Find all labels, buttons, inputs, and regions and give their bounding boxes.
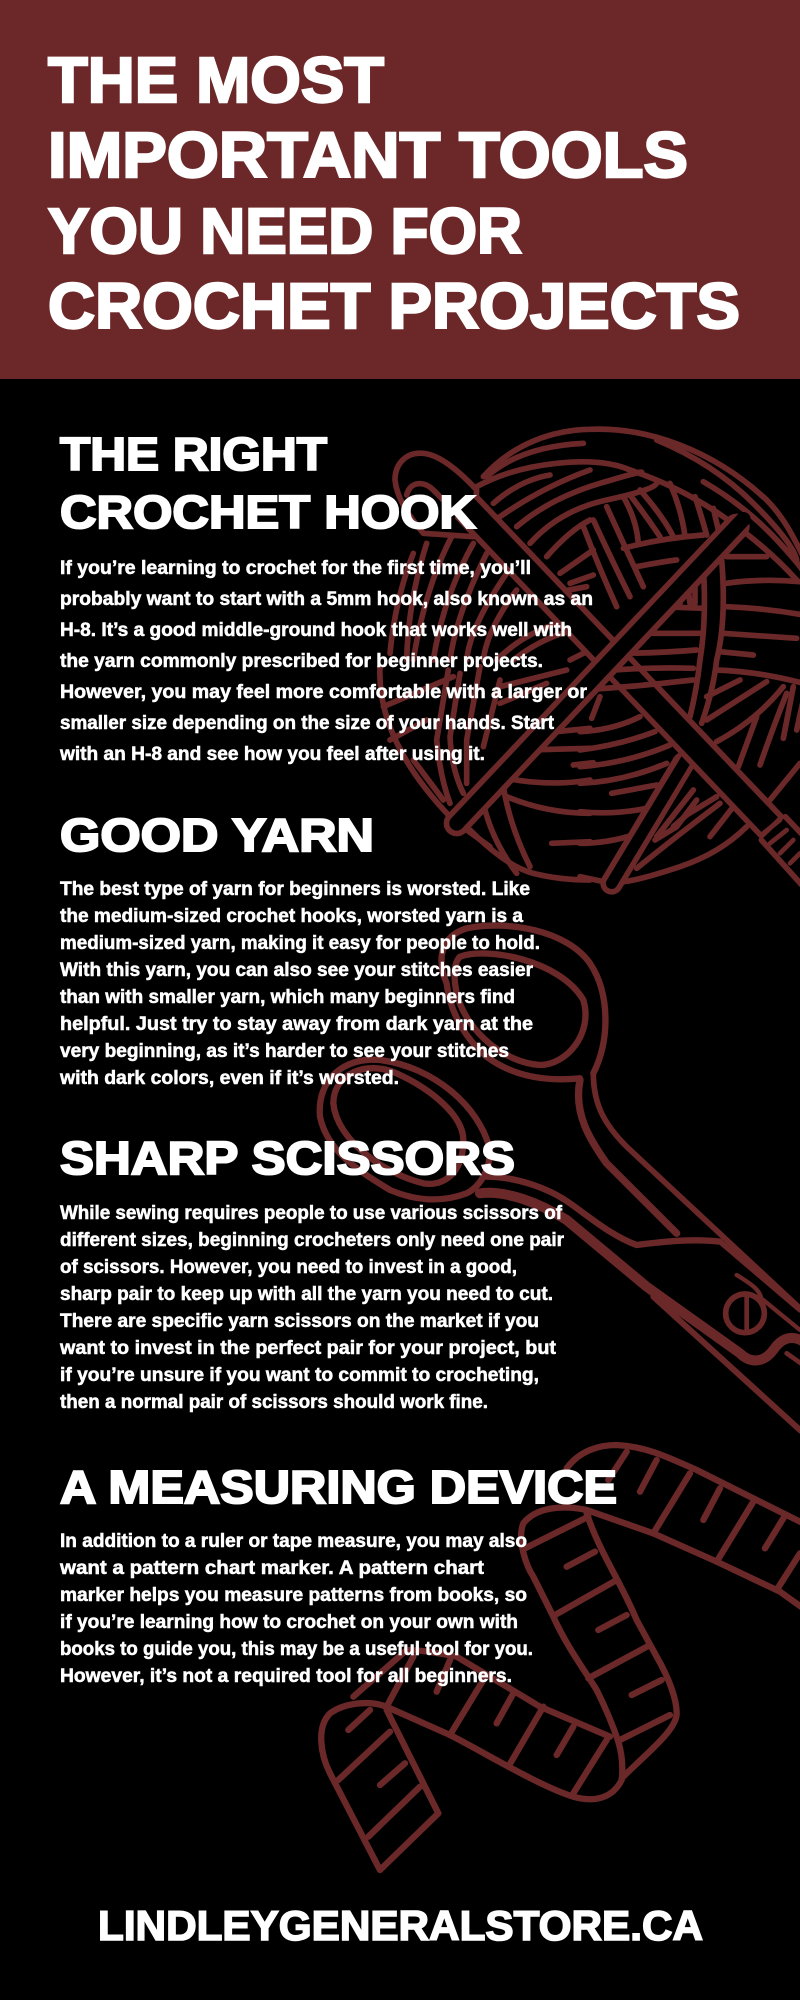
title: CROCHET PROJECTS	[48, 270, 740, 342]
title: YOU NEED FOR	[48, 195, 522, 267]
body text: There are specific yarn scissors on the market if you	[60, 1311, 539, 1332]
body text: While sewing requires people to use various scissors of	[60, 1203, 563, 1224]
body text: than with smaller yarn, which many beginners find	[60, 987, 515, 1008]
body text: want a pattern chart marker. A pattern chart	[59, 1558, 485, 1579]
body text	[59, 1203, 565, 1413]
icon: scissors	[320, 926, 800, 1447]
footer website: LINDLEYGENERALSTORE.CA	[98, 1902, 703, 1949]
title: IMPORTANT TOOLS	[48, 119, 688, 191]
body text: want to invest in the perfect pair for your project, but	[59, 1338, 557, 1359]
body text: if you’re learning how to crochet on your own with	[60, 1612, 518, 1633]
heading	[60, 428, 476, 538]
body text: probably want to start with a 5mm hook, also known as an	[60, 589, 593, 610]
header banner	[0, 0, 800, 379]
heading: THE RIGHT	[60, 428, 327, 480]
body text: with dark colors, even if it’s worsted.	[59, 1068, 399, 1089]
body text: medium-sized yarn, making it easy for people to hold.	[60, 933, 540, 954]
body text: sharp pair to keep up with all the yarn you need to cut.	[60, 1284, 553, 1305]
heading: SHARP SCISSORS	[60, 1132, 515, 1184]
section: good yarn	[59, 809, 540, 1089]
second hook shaft	[457, 527, 737, 823]
title	[48, 44, 740, 342]
body text: with an H-8 and see how you feel after using it.	[59, 744, 485, 765]
title: THE MOST	[48, 44, 384, 116]
body text: of scissors. However, you need to invest in a good,	[60, 1257, 517, 1278]
body text: If you’re learning to crochet for the first time, you’ll	[60, 558, 531, 579]
heading: CROCHET HOOK	[60, 486, 476, 538]
body text: different sizes, beginning crocheters only need one pair	[60, 1230, 565, 1251]
strands crossing the shaft	[593, 668, 693, 672]
section: a measuring device	[59, 1461, 617, 1687]
body text: marker helps you measure patterns from books, so	[60, 1585, 527, 1606]
hook head	[395, 453, 477, 537]
small hook shaft	[612, 763, 683, 883]
body text: then a normal pair of scissors should work fine.	[60, 1392, 488, 1413]
body text	[59, 879, 540, 1089]
body text: The best type of yarn for beginners is worsted. Like	[60, 879, 530, 900]
icon: yarn ball with crochet hooks	[380, 429, 800, 887]
main hook shaft	[467, 507, 773, 828]
body text: if you’re unsure if you want to commit to crocheting,	[60, 1365, 539, 1386]
body text: In addition to a ruler or tape measure, you may also	[60, 1531, 527, 1552]
section: the right crochet hook	[59, 428, 593, 765]
body text: the yarn commonly prescribed for beginner projects.	[60, 651, 543, 672]
icon: measuring tape	[321, 1445, 800, 1870]
body text: books to guide you, this may be a useful tool for you.	[60, 1639, 533, 1660]
body text: However, it’s not a required tool for all beginners.	[60, 1666, 512, 1687]
section: sharp scissors	[59, 1132, 565, 1413]
heading: A MEASURING DEVICE	[60, 1461, 617, 1513]
body text: smaller size depending on the size of your hands. Start	[60, 713, 555, 734]
body text: However, you may feel more comfortable with a larger or	[60, 682, 588, 703]
body text: very beginning, as it’s harder to see your stitches	[60, 1041, 509, 1062]
body text: H-8. It’s a good middle-ground hook that works well with	[60, 620, 572, 641]
body text: helpful. Just try to stay away from dark yarn at the	[60, 1014, 533, 1035]
body text: With this yarn, you can also see your stitches easier	[60, 960, 534, 981]
body text	[59, 1531, 533, 1687]
body text	[59, 558, 593, 765]
body text: the medium-sized crochet hooks, worsted yarn is a	[60, 906, 523, 927]
heading: GOOD YARN	[60, 809, 374, 861]
